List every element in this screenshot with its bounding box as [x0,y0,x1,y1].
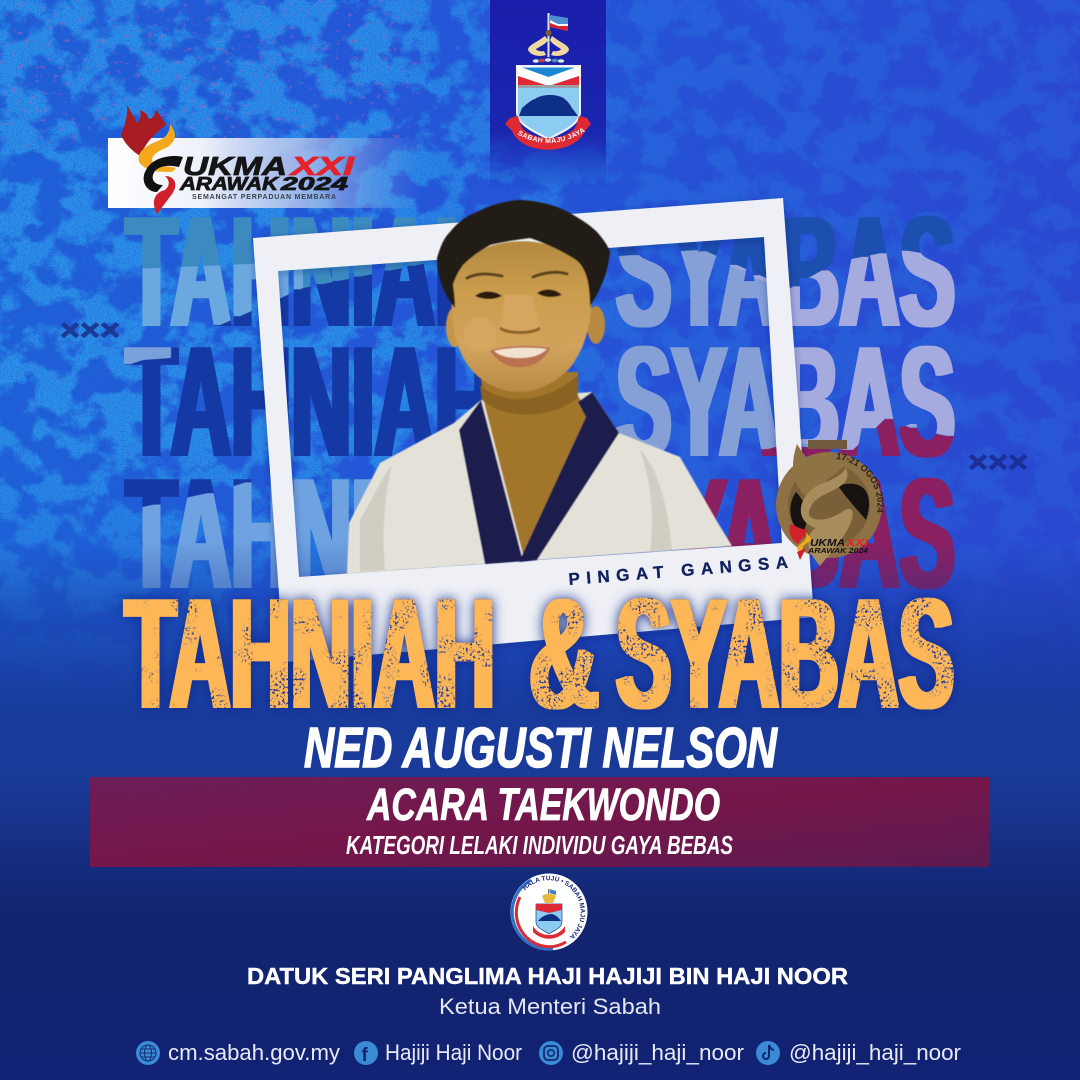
medal mini logo: XXI [845,538,868,549]
neck and chest [480,372,592,562]
collar [459,392,619,564]
medal label: PINGAT GANGSA [568,553,789,589]
athlete photo cutout [347,200,732,574]
eyes [475,289,562,299]
face [452,241,592,392]
chief minister name: DATUK SERI PANGLIMA HAJI HAJIJI BIN HAJI NOOR [247,963,848,989]
facebook: f [362,1045,368,1066]
logo wordmark: 2024 [279,174,348,194]
ghost heading rows: TAHNIAH [126,184,495,360]
uniform [347,392,732,574]
mini crest [533,889,565,939]
contact row [136,1040,961,1066]
event title: ACARA TAEKWONDO [366,779,720,830]
bronze medal [776,440,884,566]
logo wordmark: ARAWAK [179,174,280,194]
games logo band [108,105,422,214]
tiktok: @hajiji_haji_noor [789,1040,961,1065]
hair [437,200,610,308]
bronze medal: 17-21 OGOS 2024 [836,453,884,513]
logo wordmark [179,151,355,201]
crest panel [490,0,606,184]
background texture [0,0,1080,704]
medal mini logo [789,524,868,560]
nose [500,328,540,332]
ears [446,307,464,347]
main heading: TAHNIAH [125,566,495,742]
athlete name: NED AUGUSTI NELSON [304,716,778,780]
website: cm.sabah.gov.my [168,1040,340,1065]
event category: KATEGORI LELAKI INDIVIDU GAYA BEBAS [346,830,733,860]
eyebrows [467,272,567,278]
decorative cross marks right: ××× [968,446,1028,479]
logo wordmark: XXI [288,151,355,181]
state crest [505,13,591,150]
medal mini logo: UKMA [810,538,845,549]
instagram: @hajiji_haji_noor [571,1040,744,1065]
chief minister title: Ketua Menteri Sabah [439,994,661,1019]
main heading: & [529,566,599,742]
ghost heading rows [126,184,955,622]
chief minister logo [510,874,588,951]
photo frame [253,198,814,662]
state crest: SABAH MAJU JAYA [518,128,585,143]
chief minister logo: HALA TUJU • SABAH MAJU JAYA [522,876,586,938]
medal mini logo: ARAWAK 2024 [807,548,868,555]
torch flame [121,105,183,214]
logo wordmark: SEMANGAT PERPADUAN MEMBARA [192,194,336,201]
event bar [90,777,990,867]
mouth [490,346,550,367]
ghost heading rows: TAHNIAH [126,446,495,622]
facebook: Hajiji Haji Noor [385,1040,522,1065]
decorative cross marks left: ××× [60,314,120,347]
ghost heading rows: TAHNIAH [126,314,495,490]
logo wordmark: UKMA [183,151,287,181]
